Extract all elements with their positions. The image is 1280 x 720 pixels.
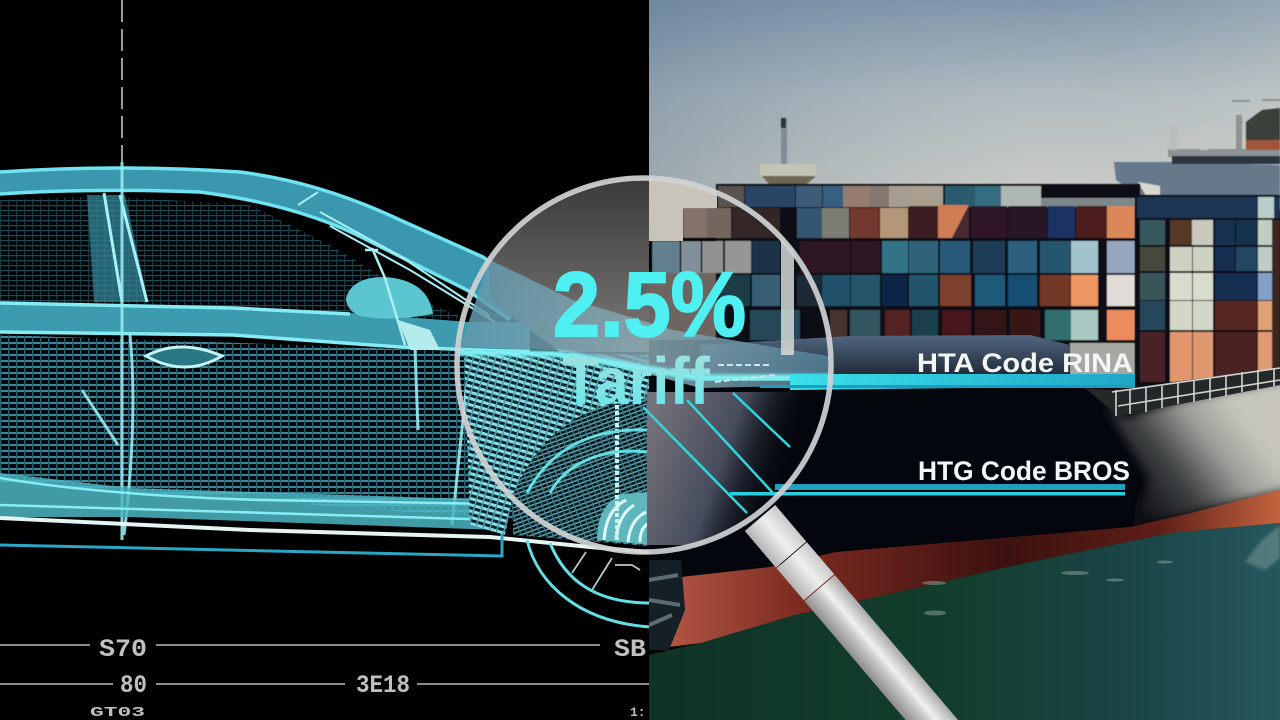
pillar [87,193,148,302]
window grid [0,197,470,320]
scale labels: SB [614,635,646,664]
sill band [0,473,500,530]
lens value: 2.5%: 2.5% [553,254,746,356]
lower cyan rail [0,534,504,558]
handle shaft [804,575,958,720]
sky [649,0,1280,340]
wheel arcs [527,430,650,627]
water [649,523,1280,720]
lens hood band [460,260,835,388]
belt line band [0,302,530,352]
grey hull bow [1105,378,1280,527]
sill highlights [0,478,500,520]
ship hull [649,378,1146,576]
left container stack [652,184,1140,375]
mirror [346,248,440,350]
belt highlights [0,303,530,352]
scale labels: 80 [120,671,147,700]
door wire grid [0,335,520,520]
handle collar [745,505,806,568]
HTS label 2: HTG Code BROS [918,456,1130,486]
HTS callout line 1 [760,374,1135,390]
port light mast [760,117,816,184]
right container stack [1135,195,1280,387]
lens label: Tariff: Tariff [562,344,711,419]
lens hood glow [457,352,835,378]
panel: wireframe car [0,0,660,720]
handle collar 2 [776,542,834,600]
scale labels: 1: [630,705,646,720]
HTS label 1: HTA Code RINA [917,348,1133,378]
scale labels: 3E18 [356,671,410,700]
left black background [0,0,649,720]
scale labels [90,635,646,720]
front fender grid [464,350,649,535]
magnifier ring [457,178,831,552]
ship superstructure [1114,100,1280,198]
lens under-hood panel [647,392,800,545]
magnifier handle [745,505,958,720]
windscreen lines [298,192,495,322]
door seams [82,162,470,540]
reflection near seam [649,560,685,650]
HTS callout line 2 [730,484,1125,496]
door handle [146,347,222,367]
wheel arch grid [513,398,649,546]
water foam [922,560,1173,616]
grey plate above hull [700,335,1070,378]
lens pale sky patch [649,178,717,241]
bow spray [1245,525,1280,570]
wheel spokes [572,552,640,590]
white sill line [0,518,660,553]
lens pole [781,190,794,355]
scale label lines [0,645,650,684]
deck railing [1085,368,1280,416]
panel: container ship photo [649,0,1280,720]
magnifier lens contents [457,178,835,545]
lens bow details [715,365,775,382]
wheel hub [597,405,649,545]
scale labels: S70 [99,635,147,664]
lens diagonal lines [643,393,790,513]
roof band [0,168,530,320]
roof outline [0,168,530,320]
red hull band [669,490,1280,647]
lens dim wedge [490,178,649,352]
dashed centre guide [121,0,123,162]
